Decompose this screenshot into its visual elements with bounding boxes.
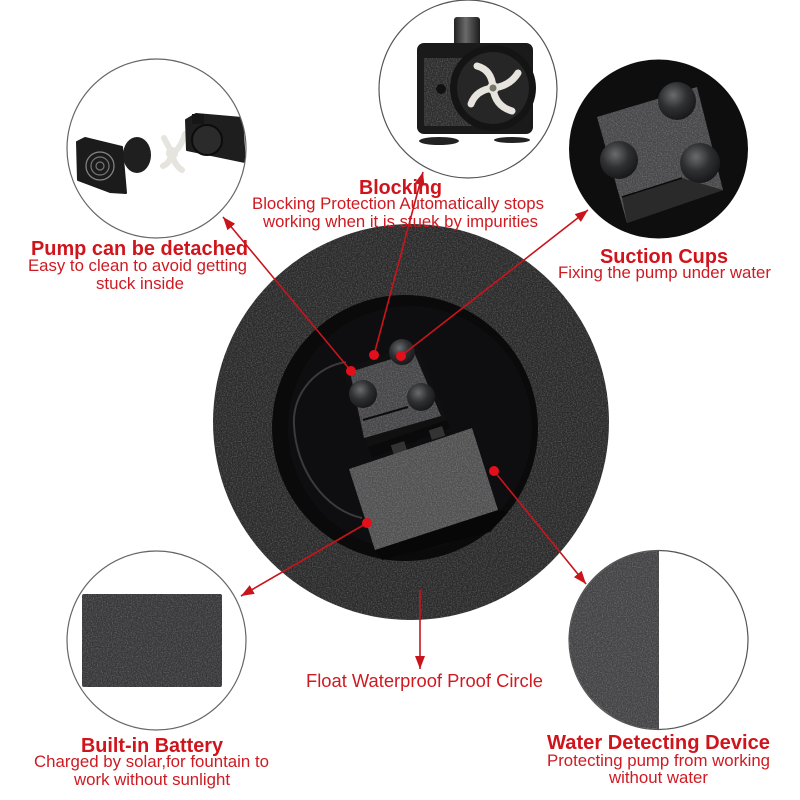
main float disk	[213, 224, 609, 620]
label: suction cups: Fixing the pump under water	[558, 263, 771, 282]
open pump body	[417, 43, 533, 134]
arrow: to pump detached	[223, 217, 351, 371]
label: water detecting device: without water	[608, 768, 708, 787]
center pump	[342, 339, 450, 458]
label: pump can be detached: stuck inside	[96, 274, 184, 293]
arrow: to water detecting	[494, 471, 586, 584]
label: built-in battery	[34, 735, 269, 789]
label: built-in battery: Charged by solar,for fountain to	[34, 752, 269, 771]
label: suction cups	[558, 246, 771, 282]
detail circle: suction cups	[569, 60, 748, 238]
arrow: to blocking	[374, 172, 423, 355]
label: built-in battery: work without sunlight	[73, 770, 230, 789]
label: pump can be detached: Pump can be detached	[31, 238, 248, 260]
label: blocking: Blocking Protection Automatically stops	[252, 194, 544, 213]
rotor chamber	[450, 58, 536, 126]
center battery box	[349, 428, 508, 560]
detail circle: pump detached	[67, 59, 246, 238]
label: suction cups: Suction Cups	[600, 246, 728, 268]
suction feet	[419, 137, 459, 145]
label: water detecting device	[547, 732, 770, 787]
detail circle: battery	[67, 551, 246, 730]
label: water detecting device: Water Detecting Device	[547, 732, 770, 754]
arrow: to suction cups	[401, 210, 588, 356]
label: blocking: working when it is stuek by impurities	[262, 212, 538, 231]
label: built-in battery: Built-in Battery	[81, 735, 224, 757]
cable loop	[294, 362, 362, 518]
white rotor	[471, 66, 518, 111]
anchor dots	[346, 350, 499, 528]
detail circle: water detecting	[569, 550, 748, 730]
round cap	[123, 137, 151, 173]
label: pump can be detached	[28, 238, 248, 293]
label: blocking: Blocking	[359, 177, 442, 199]
arrow: to battery	[241, 523, 367, 596]
detail circle: blocking	[379, 0, 557, 178]
pump body	[186, 114, 245, 162]
label: water detecting device: Protecting pump from working	[547, 751, 770, 770]
label: float circle: Float Waterproof Proof Circle	[306, 671, 543, 691]
cups	[600, 82, 720, 183]
arrows with anchor dots	[223, 172, 588, 669]
arrow: to float circle	[419, 590, 421, 669]
inner recess	[272, 295, 538, 561]
grille cover	[77, 138, 126, 193]
label: pump can be detached: Easy to clean to avoid getting	[28, 256, 247, 275]
label: blocking	[252, 177, 544, 231]
spout	[454, 17, 480, 43]
white impeller	[163, 134, 185, 170]
